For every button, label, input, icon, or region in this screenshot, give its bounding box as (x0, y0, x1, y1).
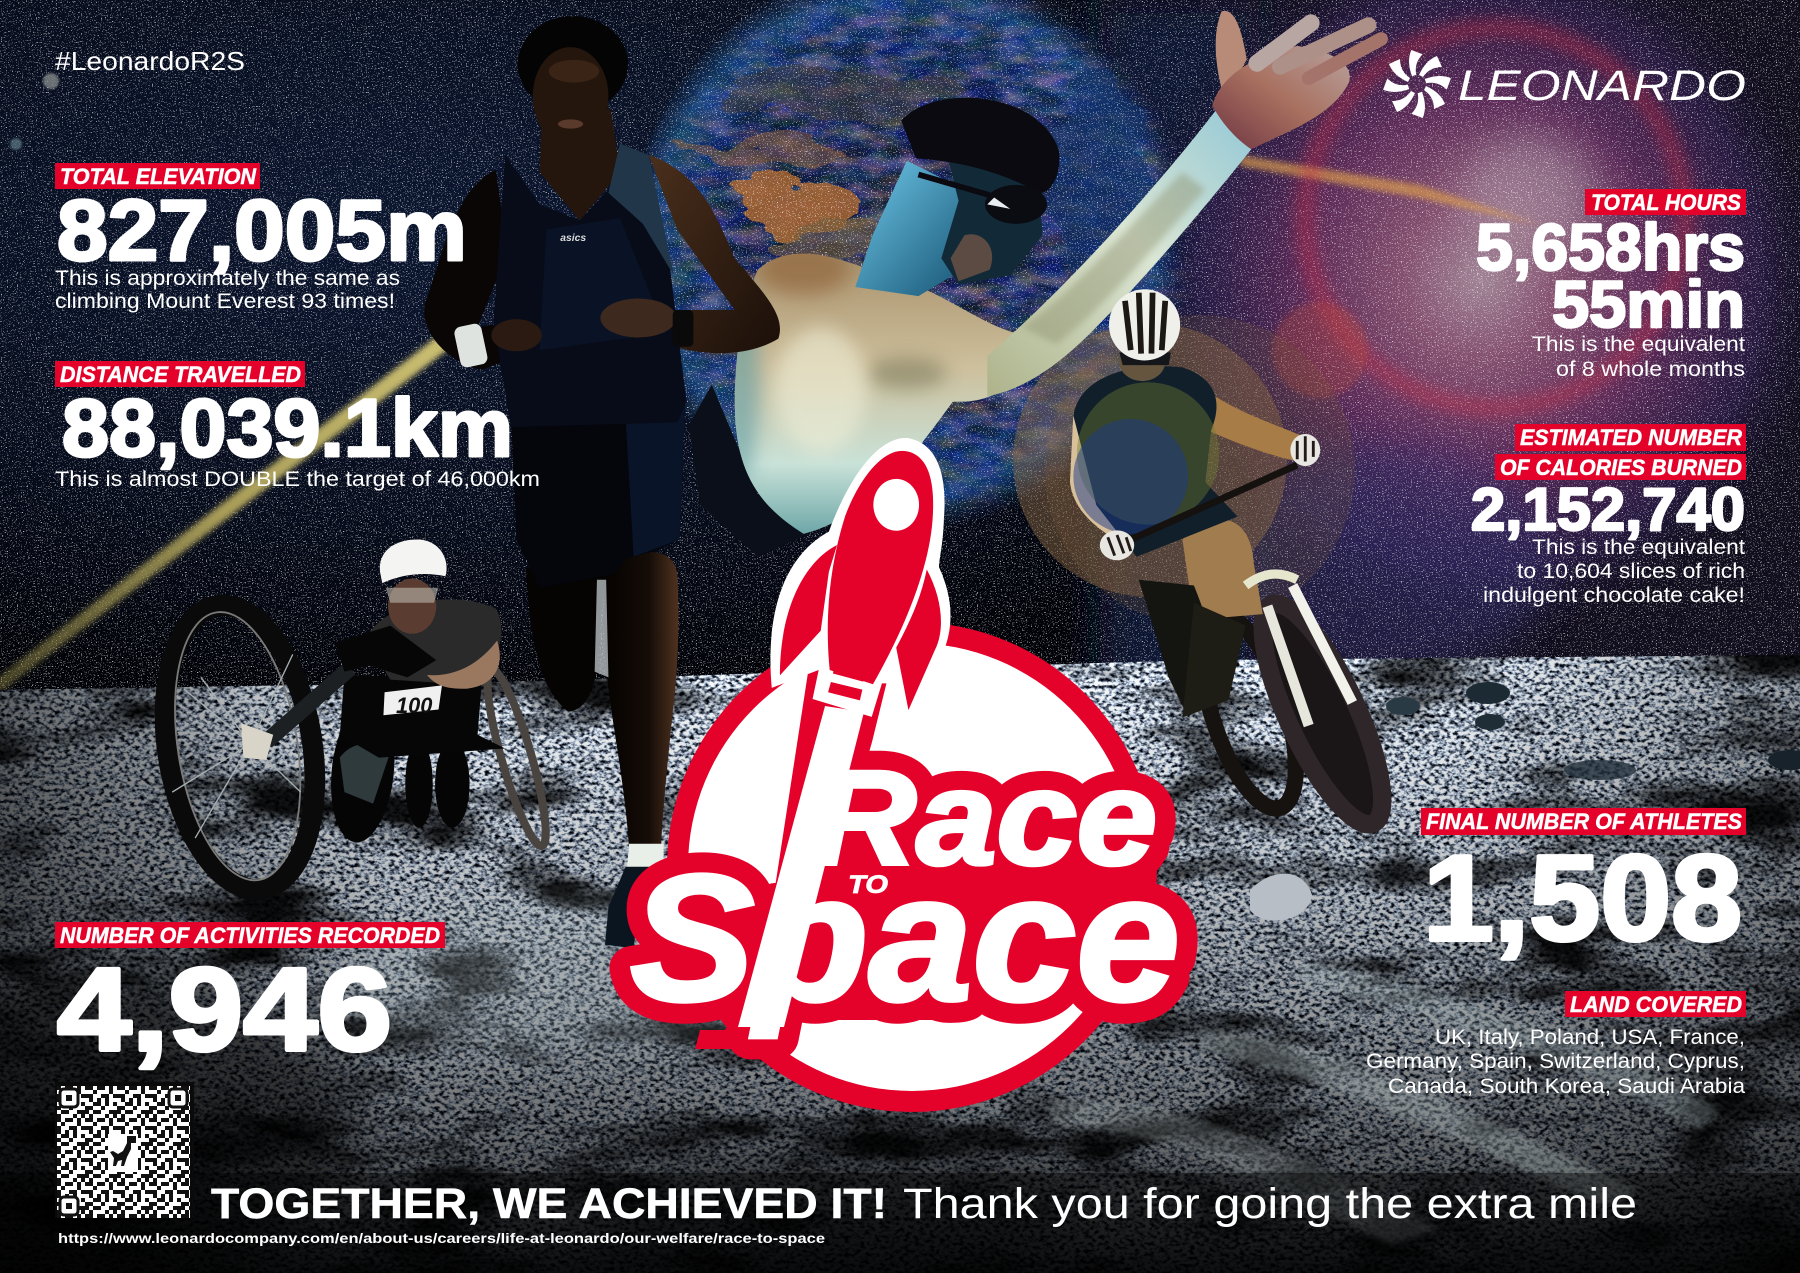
closing message: TOGETHER, WE ACHIEVED IT! (211, 1180, 887, 1228)
racing chair disc wheel (325, 697, 401, 845)
stat: calories burned: ESTIMATED NUMBER (1520, 425, 1742, 450)
closing message (211, 1180, 1637, 1228)
logo Race wordmark: Race (812, 744, 1157, 893)
cyclist (1070, 289, 1405, 838)
racer torso (365, 599, 501, 683)
stat: total elevation (55, 163, 467, 313)
wheelchair racer (146, 539, 556, 900)
stat: distance travelled: 88,039.1km (62, 383, 513, 474)
logo rocket (770, 438, 951, 724)
stat: number of activities (55, 922, 445, 1076)
rocket right fin (896, 570, 941, 710)
galaxy nebula (1100, 0, 1800, 760)
logo rocket trail (738, 706, 864, 1027)
runner hands, band and watch (491, 319, 542, 351)
swimmer goggles (985, 185, 1047, 224)
stat: calories burned: indulgent chocolate cake! (1483, 584, 1745, 607)
stat: land covered: UK, Italy, Poland, USA, France, (1435, 1026, 1745, 1049)
wheelchair racer: 100 (396, 693, 432, 718)
logo Race and Space outline: Space (630, 838, 1180, 1039)
star field (0, 0, 1800, 700)
runner front leg (604, 552, 678, 850)
runner right arm (649, 155, 780, 353)
stat: number of activities: 4,946 (57, 944, 392, 1076)
runner shorts (511, 396, 685, 588)
runner back leg (526, 568, 606, 712)
runner neck (540, 109, 620, 220)
ground shadows and light sweeps (0, 682, 1800, 1273)
stat: final number of athletes: FINAL NUMBER OF ATHLETES (1426, 809, 1742, 834)
lens flares (1013, 28, 1685, 625)
stat: total hours: 55min (1552, 267, 1745, 341)
closing message: Thank you for going the extra mile (903, 1180, 1637, 1228)
logo Race and Space outline (630, 744, 1180, 1049)
runner (424, 16, 780, 948)
stat: distance travelled: DISTANCE TRAVELLED (60, 362, 301, 387)
race to space logo (630, 438, 1180, 1112)
stat: land covered (1366, 991, 1746, 1098)
hashtag: #LeonardoR2S (55, 46, 245, 76)
stat: calories burned (1471, 424, 1746, 607)
runner singlet (494, 144, 687, 427)
cyclist head and helmet (1119, 342, 1165, 381)
stat: number of activities: NUMBER OF ACTIVITIES RECORDED (60, 923, 440, 948)
logo rocket trail outline (710, 666, 888, 1049)
leonardo starburst icon (1380, 47, 1454, 121)
logo Space wordmark: Space (630, 838, 1180, 1039)
swimmer (689, 11, 1381, 557)
leonardo wordmark: LEONARDO (1458, 62, 1746, 110)
racer head and helmet (388, 579, 436, 634)
stat: calories burned: OF CALORIES BURNED (1500, 455, 1742, 480)
rocket porthole (873, 479, 919, 531)
stat: distance travelled (55, 361, 540, 491)
rocket left fin (780, 545, 837, 675)
bike front wheel (1240, 590, 1405, 838)
background: space sky (0, 0, 1800, 760)
rocket outline (770, 438, 951, 724)
logo Race and Space outline: Race (812, 744, 1157, 893)
cyclist jersey (1073, 366, 1238, 557)
url: https://www.leonardocompany.com/en/about-us/careers/life-at-leonardo/our-welfare/race-to-space (58, 1230, 825, 1246)
stat: calories burned: to 10,604 slices of rich (1517, 560, 1745, 583)
stat: land covered: Germany, Spain, Switzerland, Cyprus, (1366, 1050, 1745, 1073)
bike rear wheel (1183, 604, 1315, 819)
qr code (55, 1082, 194, 1218)
planet earth (620, 0, 1210, 530)
runner head (518, 16, 628, 113)
stat: total hours (1476, 189, 1746, 381)
runner left arm (424, 170, 542, 370)
stat: distance travelled: This is almost DOUBLE the target of 46,000km (55, 468, 540, 491)
swimmer neck and face (855, 161, 976, 296)
cyclist gloves (1290, 434, 1320, 466)
racing chair frame (340, 675, 505, 758)
logo TO: TO (848, 871, 889, 899)
stat: total hours: of 8 whole months (1556, 358, 1745, 381)
cyclist arms (1070, 413, 1134, 542)
moon surface ground (0, 650, 1800, 1273)
logo disc (667, 622, 1157, 1112)
racer legs (405, 740, 433, 828)
icon: dinosaur (108, 1134, 138, 1172)
stat: total hours: 5,658hrs (1476, 210, 1745, 284)
stat: land covered: Canada, South Korea, Saudi Arabia (1388, 1075, 1745, 1098)
stat: calories burned: This is the equivalent (1532, 536, 1745, 559)
stat: total elevation: climbing Mount Everest 93 times! (55, 290, 395, 313)
stat: total hours: This is the equivalent (1532, 333, 1745, 356)
swimmer hand (1212, 11, 1381, 149)
stat: total elevation: TOTAL ELEVATION (60, 164, 257, 189)
stat: calories burned: 2,152,740 (1471, 476, 1745, 543)
leonardo logo (1380, 47, 1746, 121)
racing chair rear wheel right (477, 665, 556, 850)
rocket nozzle bars (833, 669, 864, 682)
stat: total elevation: This is approximately the same as (55, 267, 400, 290)
rocket body (828, 451, 933, 684)
stat: total hours: TOTAL HOURS (1591, 190, 1741, 215)
racing chair big front wheel (146, 594, 334, 900)
runner: asics (560, 233, 586, 244)
runner sock and shoe (627, 844, 664, 870)
stat: total elevation: 827,005m (57, 183, 467, 279)
light beam (0, 155, 1540, 696)
stat: final number of athletes: 1,508 (1423, 830, 1742, 966)
stat: land covered: LAND COVERED (1570, 992, 1742, 1017)
